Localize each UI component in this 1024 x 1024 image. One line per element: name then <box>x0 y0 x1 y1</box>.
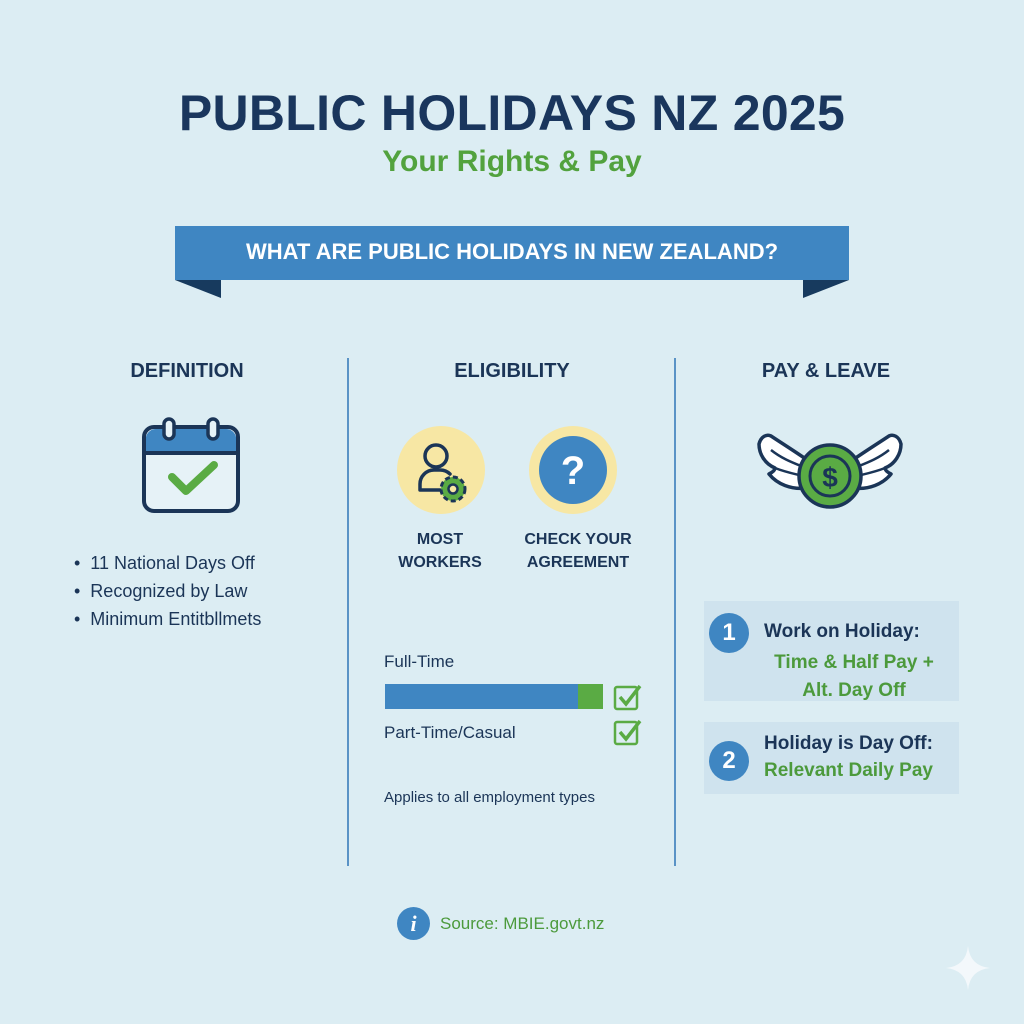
heading: eligibility: ELIGIBILITY <box>454 360 570 382</box>
label: most workers: MOST <box>417 531 463 548</box>
note: Applies to all employment types <box>384 789 595 806</box>
label: check your agreement: CHECK YOUR <box>524 531 632 548</box>
bar: full-time <box>385 684 603 709</box>
icon: winged coin: $ <box>822 462 838 493</box>
box 1: work on holiday: 1 <box>722 619 736 646</box>
icon: most workers <box>397 426 485 514</box>
box 2: holiday is day off: Relevant Daily Pay <box>764 760 933 781</box>
label: most workers <box>398 531 482 571</box>
source: Source: MBIE.govt.nz <box>440 914 604 933</box>
icon: checkbox 2 <box>614 720 642 746</box>
definition bullets: • Recognized by Law <box>74 581 247 601</box>
box 2: holiday is day off: Holiday is Day Off: <box>764 733 933 754</box>
box 1: work on holiday: Time & Half Pay + <box>774 652 934 673</box>
banner <box>175 226 849 298</box>
box 1: work on holiday: Alt. Day Off <box>802 680 906 701</box>
box 1: work on holiday <box>704 601 959 701</box>
title: PUBLIC HOLIDAYS NZ 2025 <box>179 85 845 141</box>
label: part-time: Part-Time/Casual <box>384 723 516 742</box>
icon: sparkle <box>947 947 989 989</box>
icon: question <box>529 426 617 514</box>
box 2: holiday is day off <box>704 722 959 794</box>
box 1: work on holiday: Work on Holiday: <box>764 621 920 642</box>
box 2: holiday is day off: 2 <box>722 747 736 774</box>
definition bullets: • Minimum Entitbllmets <box>74 609 261 629</box>
definition bullets <box>74 553 261 629</box>
icon: winged coin <box>757 434 903 509</box>
label: full-time: Full-Time <box>384 652 454 671</box>
icon: calendar check <box>142 417 240 513</box>
banner: WHAT ARE PUBLIC HOLIDAYS IN NEW ZEALAND? <box>246 239 778 264</box>
definition bullets: • 11 National Days Off <box>74 553 255 573</box>
source: i <box>410 911 417 936</box>
heading: definition: DEFINITION <box>130 360 244 382</box>
subtitle: Your Rights & Pay <box>382 145 642 178</box>
source <box>397 907 604 940</box>
icon: question: ? <box>561 449 585 493</box>
icon: checkbox 1 <box>614 684 642 710</box>
heading: pay & leave: PAY & LEAVE <box>762 360 890 382</box>
label: check your agreement: AGREEMENT <box>527 554 629 571</box>
label: check your agreement <box>524 531 632 571</box>
label: most workers: WORKERS <box>398 554 482 571</box>
